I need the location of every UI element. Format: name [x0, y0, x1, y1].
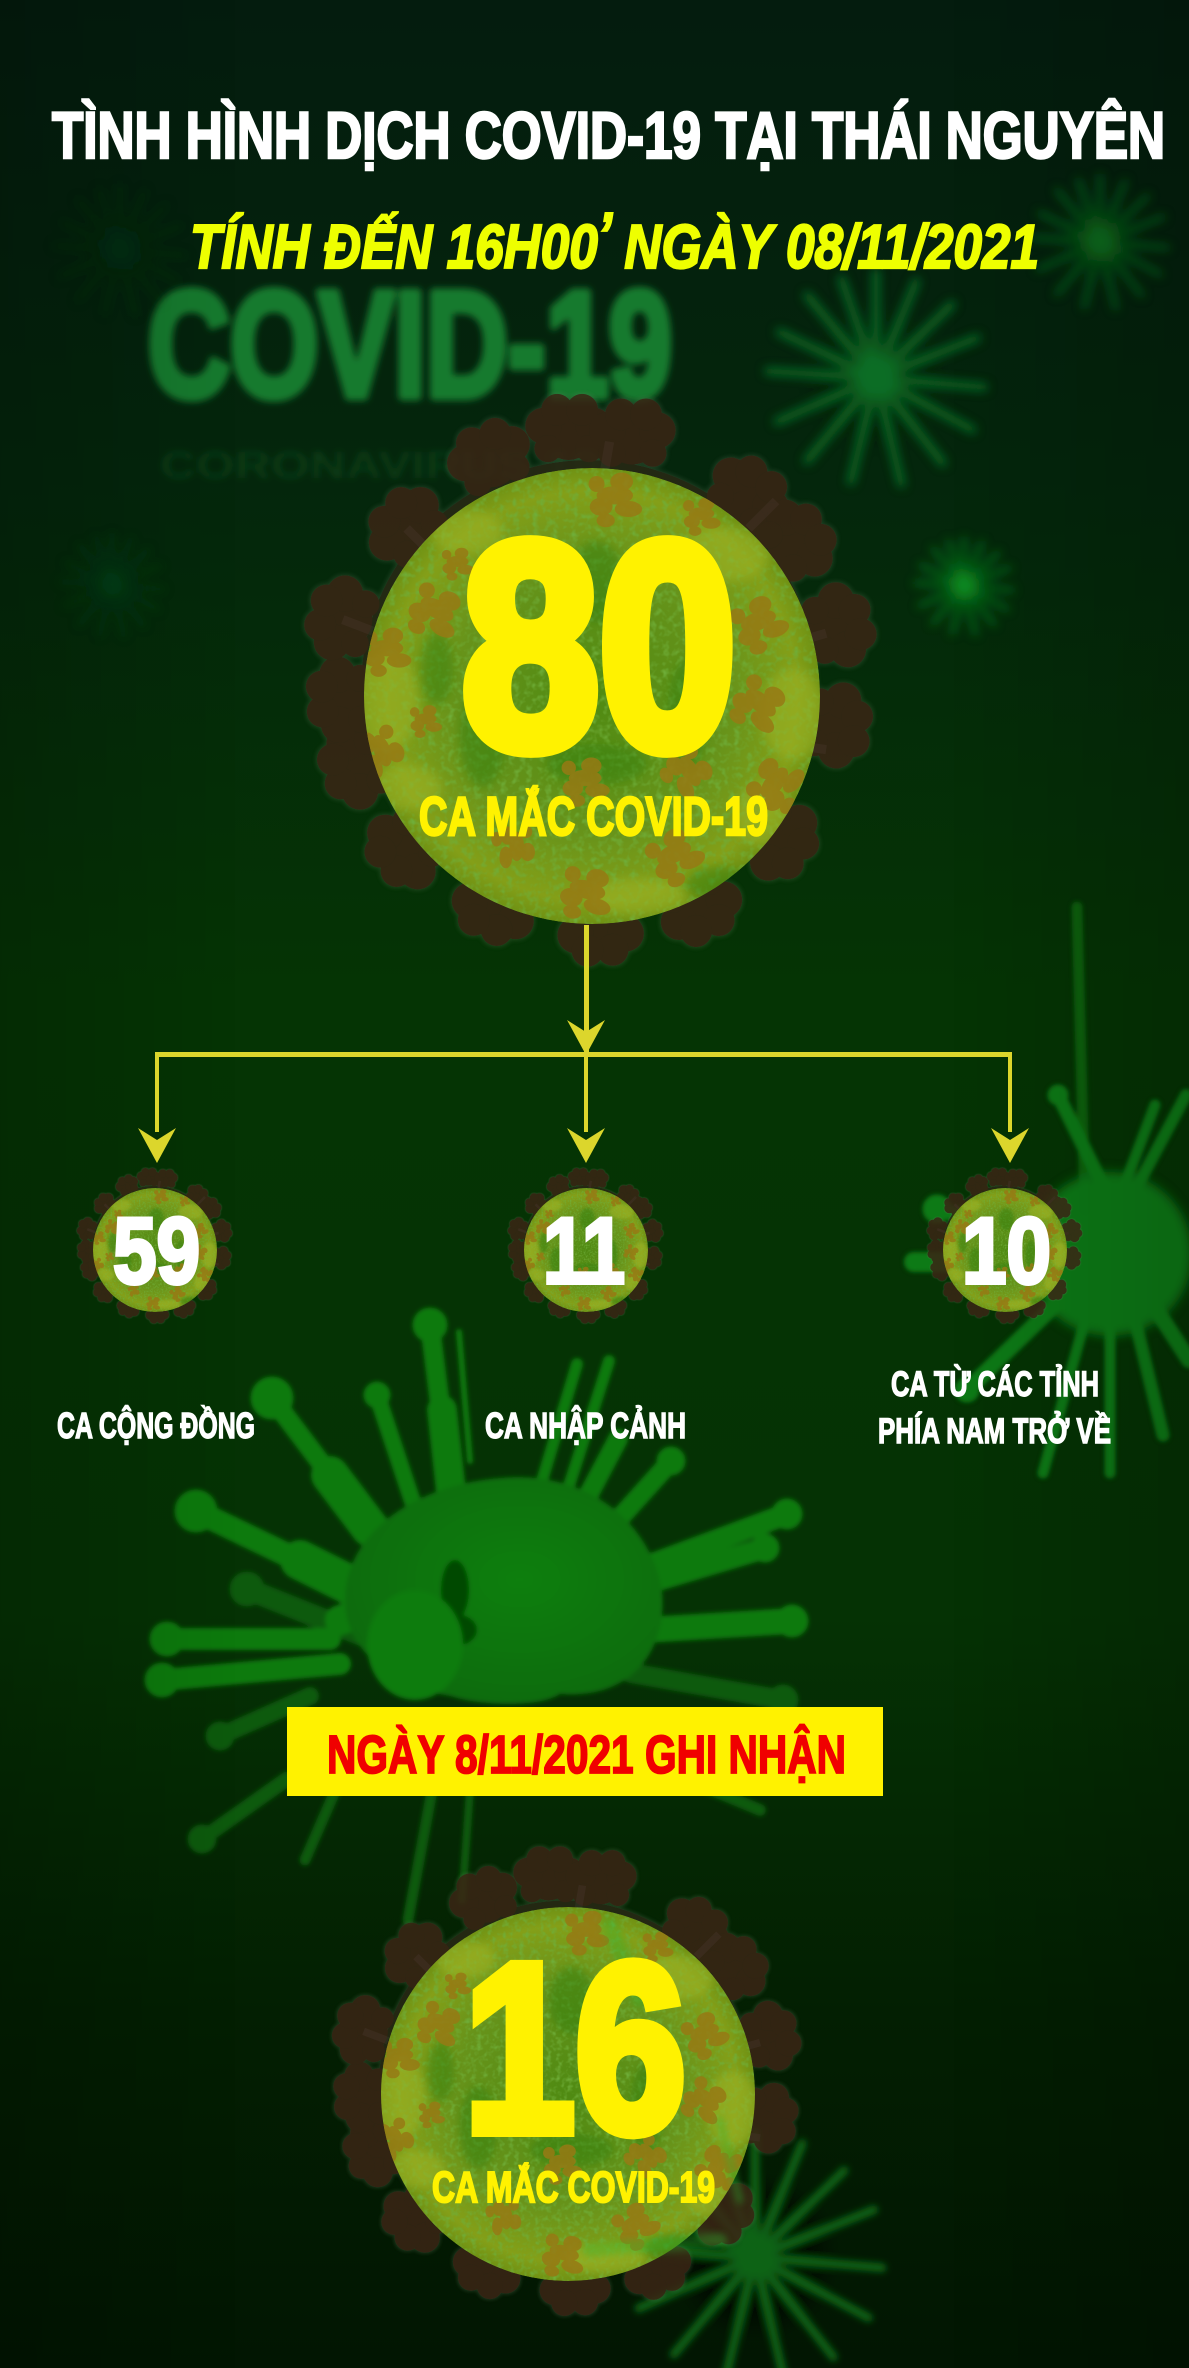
number: southern cases: 10	[962, 1198, 1051, 1303]
number: imported cases: 11	[543, 1198, 625, 1303]
background: blurred COVID-19 lettering: CORONAVIRUS 19	[160, 445, 600, 487]
background: green virus, lower right	[628, 2133, 882, 2368]
label: southern cases: CA TỪ CÁC TỈNH	[891, 1364, 1099, 1404]
icon: coronavirus, south	[925, 1168, 1084, 1324]
background: small green virus particles	[54, 176, 1168, 636]
subtitle: date and time: ’	[598, 201, 613, 270]
icon: coronavirus, community	[75, 1168, 234, 1324]
subtitle: date and time: NGÀY 08/11/2021	[610, 213, 1039, 282]
panel: total cases	[296, 394, 883, 968]
label: total cases: CA MẮC COVID-19	[419, 785, 768, 847]
overlay: green virus glow over the circle	[590, 1925, 740, 2250]
subtitle: date and time: TÍNH ĐẾN 16H00	[190, 213, 683, 282]
icon: coronavirus, new cases	[326, 1846, 807, 2317]
panel: community cases	[57, 1168, 255, 1446]
icon: coronavirus, total	[296, 394, 883, 968]
label: southern cases: PHÍA NAM TRỞ VỀ	[878, 1411, 1111, 1451]
background: blurred COVID-19 lettering	[148, 260, 672, 487]
number: total cases: 80	[462, 483, 736, 809]
background: blurred COVID-19 lettering: COVID-19	[148, 260, 672, 428]
banner: recorded on 8/11/2021: NGÀY 8/11/2021 GHI NHẬN	[327, 1724, 846, 1785]
label: new cases: CA MẮC COVID-19	[432, 2162, 715, 2212]
panel: cases from southern provinces	[878, 1168, 1111, 1451]
background: large green virus	[145, 1308, 808, 1920]
connector arrows	[138, 925, 1029, 1163]
label: community cases: CA CỘNG ĐỒNG	[57, 1404, 255, 1446]
panel: imported cases	[485, 1168, 686, 1446]
number: community cases: 59	[113, 1198, 200, 1303]
number: new cases: 16	[464, 1914, 686, 2182]
background: green virus behind the right-hand count	[914, 907, 1189, 1473]
banner: recorded on 8/11/2021	[287, 1707, 883, 1796]
panel: new cases	[326, 1846, 807, 2317]
icon: coronavirus, imported	[506, 1168, 665, 1324]
label: southern cases	[878, 1364, 1111, 1451]
label: imported cases: CA NHẬP CẢNH	[485, 1404, 686, 1446]
